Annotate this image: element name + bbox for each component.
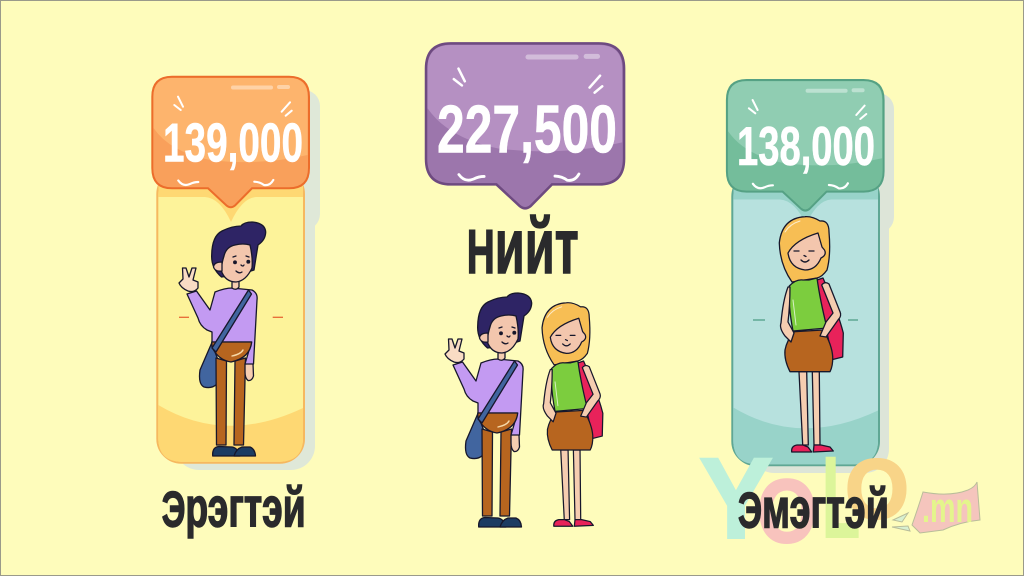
bubble tail shadow: male xyxy=(158,180,303,222)
panel: total xyxy=(426,43,624,527)
figure: man xyxy=(179,222,266,456)
accent dashes: female xyxy=(753,319,858,321)
panel: female xyxy=(727,80,894,473)
label: male: Эрэгтэй xyxy=(162,476,306,539)
figure: woman, total xyxy=(542,303,603,526)
watermark: YOLO.mn: O xyxy=(757,462,817,562)
watermark: YOLO.mn: .mn xyxy=(922,484,973,531)
panel body: female xyxy=(732,172,879,465)
label: total: Нийт xyxy=(467,202,579,290)
bubble tail shadow: female xyxy=(734,182,878,224)
speech bubble: total count xyxy=(426,43,624,208)
panel floor: male xyxy=(158,405,303,462)
panel shadow: female xyxy=(745,93,894,473)
speech bubble: male count xyxy=(152,77,309,207)
panel shadow: male xyxy=(170,90,320,470)
watermark: YOLO.mn: L xyxy=(822,434,860,562)
figure: woman xyxy=(779,217,843,452)
watermark arrows xyxy=(892,513,910,531)
watermark flag xyxy=(912,482,980,533)
panel: male xyxy=(152,77,320,470)
label: female: Эмэгтэй xyxy=(738,476,889,540)
watermark: YOLO.mn xyxy=(699,434,980,563)
value: 227,500: 227,500 xyxy=(437,92,617,168)
panel body: male xyxy=(157,170,304,463)
value: 138,000: 138,000 xyxy=(737,115,875,177)
watermark: YOLO.mn: Y xyxy=(699,435,773,563)
speech bubble: female count xyxy=(727,80,884,211)
accent dashes: male xyxy=(179,316,283,318)
value: 139,000: 139,000 xyxy=(163,112,303,174)
figure: man, total xyxy=(445,293,532,527)
panel floor: female xyxy=(733,408,878,464)
watermark: YOLO.mn: O xyxy=(845,442,909,536)
